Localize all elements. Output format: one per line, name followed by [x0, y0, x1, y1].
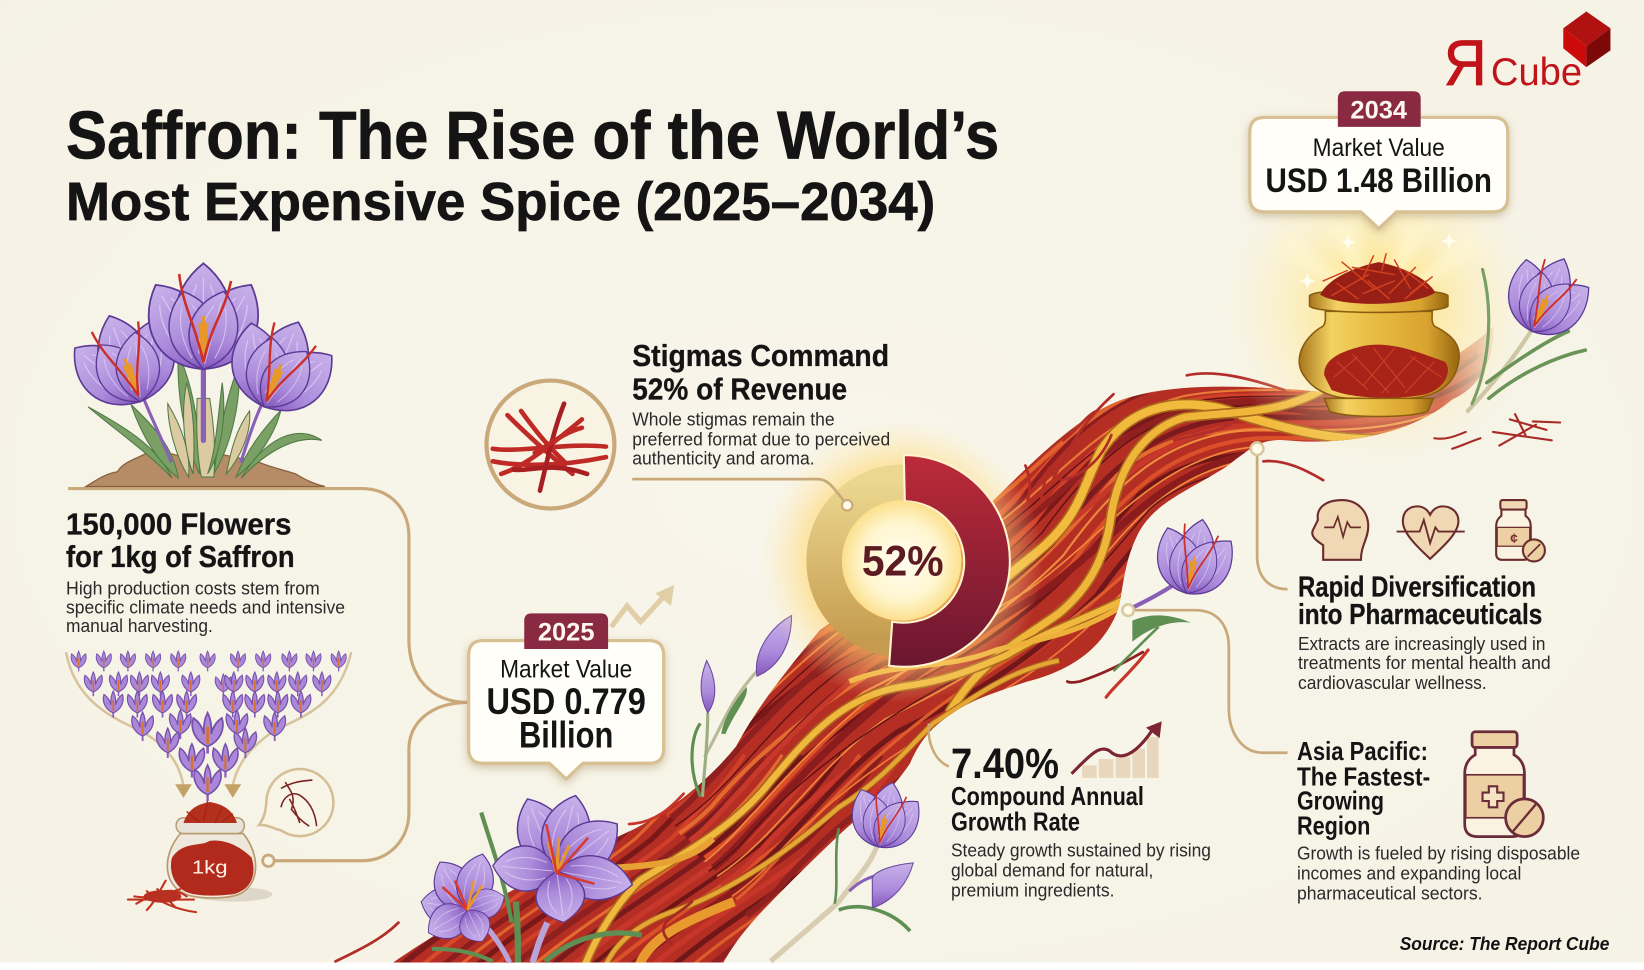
- card: 2034 market value: [1250, 91, 1508, 229]
- icon: medicine bottle: [1465, 732, 1543, 837]
- body text: cardiovascular wellness.: [1298, 672, 1487, 693]
- heading: [66, 508, 295, 574]
- card: 2025 market value: [469, 585, 674, 779]
- body text: Growth is fueled by rising disposable: [1297, 843, 1580, 864]
- heading: into Pharmaceuticals: [1298, 598, 1542, 630]
- heading: Rapid Diversification: [1298, 571, 1536, 603]
- panel: rapid diversification: [1298, 500, 1551, 693]
- card: 2025 market value: Billion: [519, 715, 613, 756]
- body text: [951, 840, 1211, 900]
- flower: right crocus on ribbon edge: [834, 773, 935, 865]
- body text: premium ingredients.: [951, 879, 1115, 900]
- body text: Whole stigmas remain the: [632, 409, 835, 430]
- flower: left: [48, 293, 207, 436]
- heading: Compound Annual: [951, 781, 1144, 811]
- card: 2034 market value: 2034: [1350, 96, 1407, 124]
- flower: large open: [491, 790, 636, 926]
- body text: High production costs stem from: [66, 577, 320, 598]
- saffron ribbon: [393, 327, 1494, 962]
- heading: for 1kg of Saffron: [66, 540, 295, 574]
- flower: center: [131, 263, 276, 383]
- heading: Growth Rate: [951, 806, 1080, 836]
- icon: heart with pulse: [1397, 506, 1465, 559]
- body text: pharmaceutical sectors.: [1297, 883, 1483, 904]
- body text: authenticity and aroma.: [632, 447, 815, 468]
- gold strands: [585, 390, 1410, 965]
- connectors: right side: [929, 442, 1288, 766]
- small flowers: [71, 651, 346, 801]
- pot foot: [1324, 398, 1433, 416]
- heading: Asia Pacific:: [1297, 736, 1428, 766]
- body text: global demand for natural,: [951, 859, 1153, 880]
- flower: mid-left crocus buds: [692, 615, 792, 797]
- stray saffron threads: [336, 373, 1323, 961]
- stat: 7.40%: [951, 740, 1059, 788]
- body text: [66, 577, 345, 636]
- body text: manual harvesting.: [66, 615, 213, 636]
- year badge: [1338, 91, 1421, 127]
- panel: stigmas command 52%: [486, 339, 890, 511]
- body text: [1297, 843, 1580, 904]
- heading: Growing: [1297, 785, 1384, 815]
- connectors: left panel to 2025 card: [68, 489, 469, 867]
- body text: [632, 409, 890, 468]
- heading: Region: [1297, 811, 1370, 841]
- body text: preferred format due to perceived: [632, 429, 890, 450]
- card: 2025 market value: 2025: [538, 619, 594, 647]
- glow and rays: [1221, 152, 1536, 467]
- heading: [1298, 571, 1542, 630]
- panel: 150,000 flowers: [66, 508, 345, 636]
- icon: small medicine bottle: ¢: [1510, 531, 1518, 546]
- soil mound: [86, 451, 325, 486]
- heading: 150,000 Flowers: [66, 508, 291, 542]
- pot rim: [1310, 289, 1448, 312]
- heading: [1297, 736, 1430, 841]
- illustration: crocus plant group: [48, 263, 359, 486]
- card: 2034 market value: USD 1.48 Billion: [1266, 162, 1492, 200]
- jar: 1kg: 1kg: [192, 856, 228, 877]
- heading: The Fastest-: [1297, 761, 1430, 791]
- chart: rising bars with arrow: [1072, 721, 1162, 778]
- leaves: [88, 353, 322, 478]
- panel: CAGR 7.40%: [951, 721, 1211, 900]
- year badge: [524, 613, 608, 649]
- body text: Steady growth sustained by rising: [951, 840, 1211, 861]
- title: Most Expensive Spice (2025–2034): [66, 173, 935, 232]
- pot body: [1299, 311, 1459, 398]
- logo: RCube: Я: [1444, 26, 1487, 99]
- stem and leaves: right crocus: [771, 828, 910, 961]
- illustration: flowers funneling into jar: [66, 651, 351, 912]
- card: 2034 market value: Market Value: [1313, 134, 1445, 162]
- logo: RCube: [1444, 12, 1610, 99]
- funnel arrows: [66, 652, 351, 786]
- panel: asia pacific: [1297, 732, 1580, 904]
- saffron heap: [1320, 262, 1435, 304]
- card: 2025 market value: USD 0.779: [486, 681, 646, 722]
- donut chart: 52%: 52%: [862, 538, 944, 586]
- body text: Extracts are increasingly used in: [1298, 633, 1545, 654]
- stems: [144, 367, 262, 461]
- icon: head with pulse: [1312, 500, 1368, 560]
- title: Saffron: The Rise of the World’s: [66, 97, 999, 173]
- flower: small left open: [418, 849, 509, 948]
- body text: specific climate needs and intensive: [66, 596, 345, 617]
- scattered threads: [1434, 414, 1560, 449]
- heading: [951, 781, 1144, 836]
- pot contents: [1324, 345, 1448, 398]
- title: [66, 97, 999, 232]
- illustration: crocus right of pot: [1434, 238, 1611, 449]
- flower: right: [199, 298, 359, 443]
- heading: Stigmas Command: [632, 339, 889, 373]
- illustration: golden pot with saffron: [1221, 152, 1536, 467]
- icon: speech bubble with hand: [259, 769, 333, 836]
- donut chart: 52%: [760, 419, 1043, 702]
- card: 2025 market value: Market Value: [500, 655, 632, 683]
- icon: small medicine bottle: [1496, 500, 1545, 561]
- heading: 52% of Revenue: [632, 372, 847, 406]
- body text: treatments for mental health and: [1298, 652, 1551, 673]
- flower: crocus at mid ribbon: [1113, 509, 1251, 671]
- illustration: large crocuses, bottom: [418, 773, 935, 962]
- source note: Source: The Report Cube: [1400, 933, 1609, 954]
- leaves and stems: [432, 813, 642, 962]
- jar: 1kg: [167, 801, 273, 902]
- body text: [1298, 633, 1551, 693]
- trend arrow: [611, 596, 665, 627]
- logo: RCube: Cube: [1491, 51, 1582, 94]
- heading: [632, 339, 889, 406]
- connector to donut: [632, 479, 852, 511]
- loose saffron pile: [128, 881, 196, 912]
- icon: stigma threads circle: [486, 381, 614, 508]
- body text: incomes and expanding local: [1297, 863, 1521, 884]
